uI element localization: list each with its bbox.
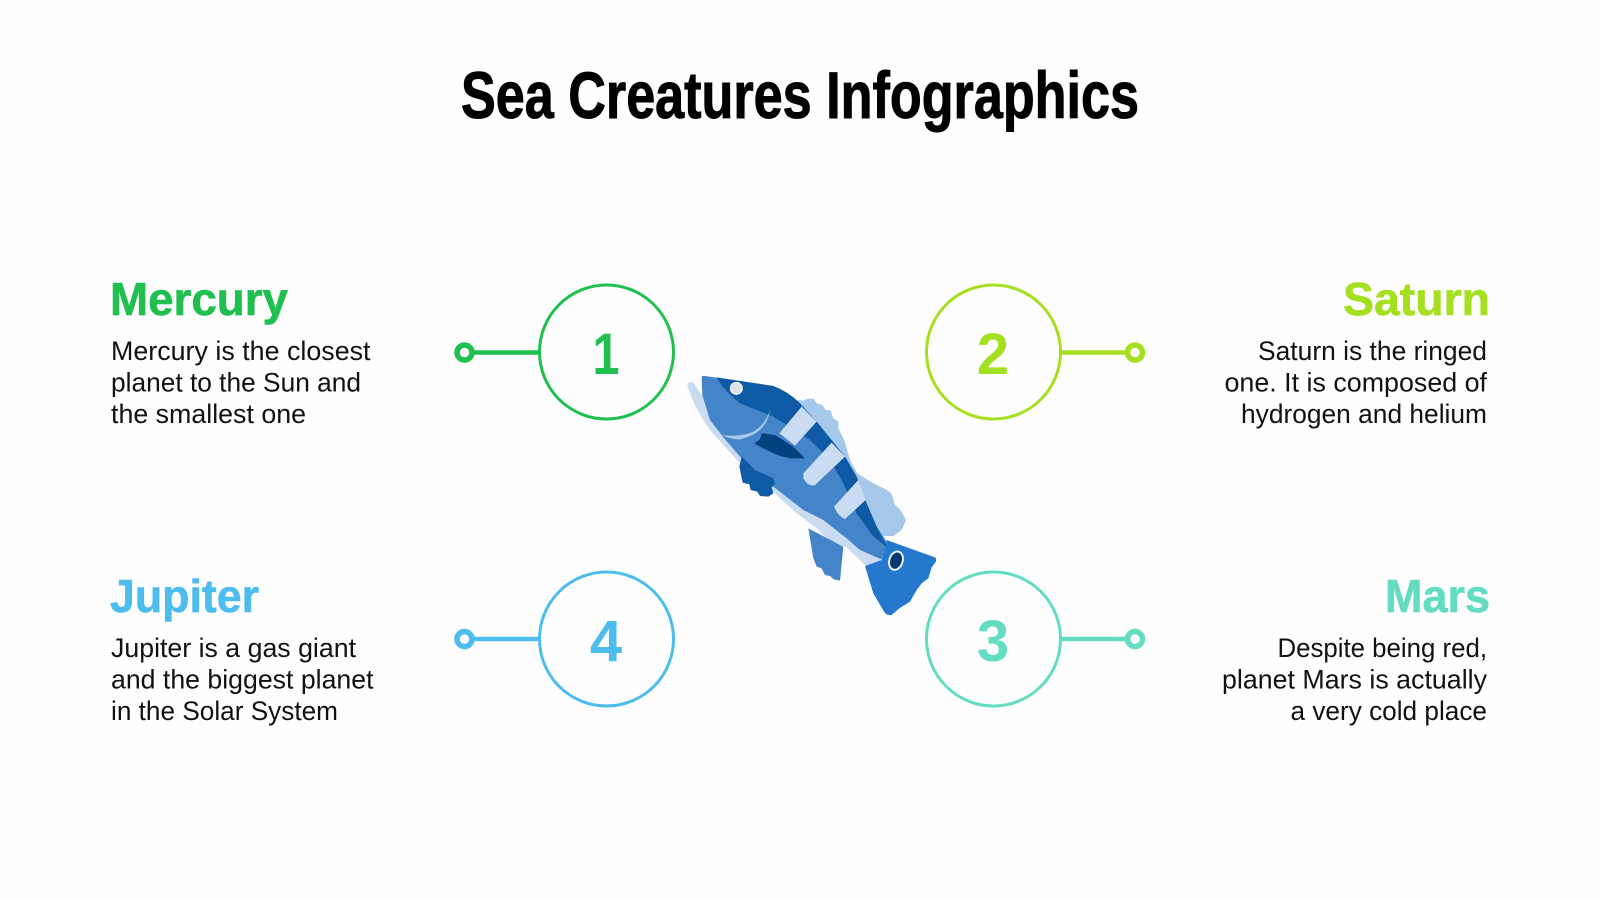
number circle 4: 4 <box>590 609 622 674</box>
number circle 1: 1 <box>592 322 620 387</box>
text block: Mars description <box>1222 633 1488 726</box>
heading: Saturn: Saturn <box>1343 273 1490 325</box>
number circle 3 <box>926 572 1060 706</box>
text block: Jupiter description: Jupiter is a gas giant <box>111 633 357 663</box>
heading: Jupiter: Jupiter <box>110 570 259 622</box>
text block: Mercury description: the smallest one <box>111 399 306 429</box>
number circle 2 <box>926 285 1060 419</box>
panel: Mars <box>926 570 1490 726</box>
text block: Mars description: Despite being red, <box>1278 633 1487 663</box>
number circle 1 <box>540 285 674 419</box>
text block: Mercury description: planet to the Sun and <box>111 368 361 398</box>
text block: Mars description: a very cold place <box>1290 696 1487 726</box>
text block: Saturn description: Saturn is the ringed <box>1258 336 1487 366</box>
text block: Jupiter description: in the Solar System <box>111 696 338 726</box>
title: Sea Creatures Infographics <box>461 58 1139 132</box>
number circle 4 <box>540 572 674 706</box>
text block: Jupiter description <box>111 633 374 726</box>
text block: Mars description: planet Mars is actually <box>1222 664 1488 694</box>
number circle 3: 3 <box>977 609 1009 674</box>
connector: Mercury <box>457 345 539 360</box>
panel: Jupiter <box>110 570 674 726</box>
panel: Mercury <box>110 273 674 429</box>
connector: Saturn <box>1061 345 1142 360</box>
connector: Jupiter <box>457 632 539 646</box>
text block: Saturn description: one. It is composed of <box>1224 368 1488 398</box>
connector: Mars <box>1061 632 1142 646</box>
text block: Jupiter description: and the biggest planet <box>111 664 374 694</box>
text block: Mercury description: Mercury is the closest <box>111 336 371 366</box>
number circle 2: 2 <box>977 322 1009 387</box>
heading: Mars: Mars <box>1385 570 1490 622</box>
text block: Saturn description: hydrogen and helium <box>1241 399 1487 429</box>
panel: Saturn <box>926 273 1490 429</box>
icon: blue fish <box>687 376 936 615</box>
text block: Saturn description <box>1224 336 1488 429</box>
heading: Mercury: Mercury <box>110 273 288 325</box>
text block: Mercury description <box>111 336 371 429</box>
